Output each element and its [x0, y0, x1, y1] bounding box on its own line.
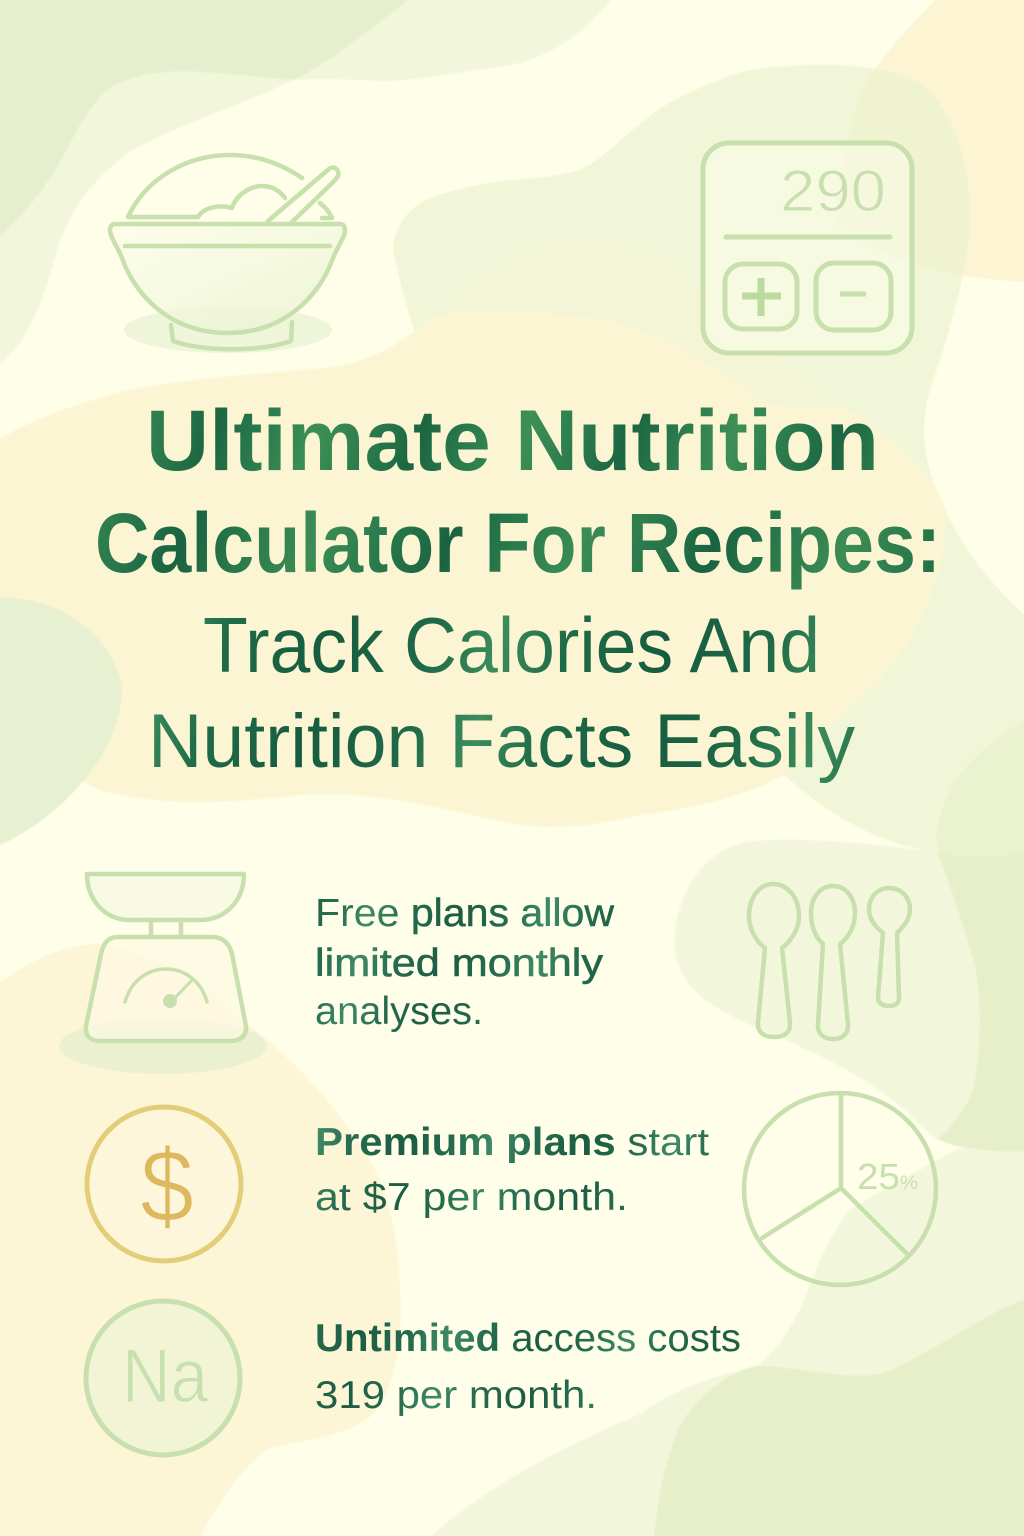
icon: spoons [749, 884, 910, 1039]
icon: pie chart [744, 1093, 936, 1285]
subtitle line 1: Track Calories And [203, 601, 820, 689]
text: premium plans: Premium plans start [315, 1121, 709, 1164]
icon: dollar coin: $ [140, 1129, 194, 1245]
icon: kitchen scale [59, 874, 267, 1074]
pie label: 25% [857, 1156, 918, 1197]
icon: dollar coin [87, 1107, 241, 1261]
icon: mixing bowl [110, 155, 345, 353]
title [95, 393, 941, 784]
icon: sodium circle [86, 1301, 240, 1455]
text: unlimited access [315, 1317, 741, 1417]
text: unlimited access: 319 per month. [315, 1374, 597, 1417]
title line 2: Calculator For Recipes: [95, 496, 941, 590]
icon: sodium circle: Na [122, 1334, 209, 1419]
icon: calculator [703, 143, 912, 353]
subtitle line 2: Nutrition Facts Easily [148, 699, 855, 784]
text: premium plans: at $7 per month. [315, 1176, 628, 1219]
text: free plans: limited monthly [315, 942, 604, 985]
text: free plans [315, 892, 615, 1033]
text: free plans: Free plans allow [315, 892, 615, 935]
text: free plans: analyses. [315, 990, 483, 1033]
calculator display: 290 [780, 159, 886, 224]
text: premium plans [315, 1121, 709, 1219]
title line 1: Ultimate Nutrition [146, 393, 879, 489]
text: unlimited access: Untimited access costs [315, 1317, 741, 1360]
